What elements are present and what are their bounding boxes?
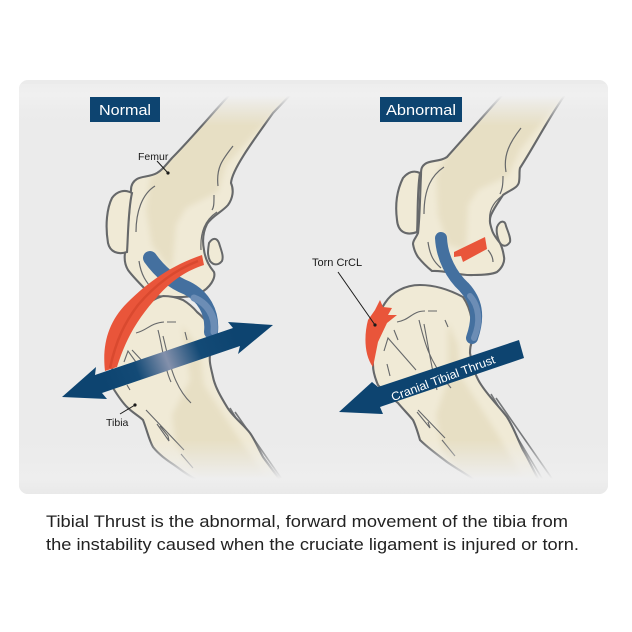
arrow: cranial tibial thrust — [339, 340, 524, 414]
illustration: abnormal knee — [339, 88, 570, 490]
icon: normal red ligament — [104, 255, 204, 371]
icon: normal femur bone — [125, 88, 295, 297]
icon: normal patella — [107, 191, 132, 253]
caption text — [46, 513, 579, 554]
icon: normal fabella — [208, 239, 223, 264]
arrow: normal two-way thrust — [62, 322, 273, 399]
label: Torn CrCL — [312, 257, 377, 327]
icon: abnormal patella — [396, 172, 420, 234]
icon: abnormal tibia bone — [372, 285, 540, 490]
label: Normal — [90, 97, 160, 122]
label: Femur: Femur — [138, 151, 169, 163]
label: Tibia: Tibia — [106, 417, 129, 429]
icon: abnormal tendons — [487, 394, 553, 480]
illustration: normal knee — [62, 88, 295, 490]
label: Abnormal: Abnormal — [386, 102, 456, 119]
label: Tibia — [106, 403, 137, 429]
icon: torn red ligament — [365, 300, 397, 367]
label: Abnormal — [380, 97, 462, 122]
icon: abnormal red ligament fragment — [454, 237, 487, 262]
caption text: the instability caused when the cruciate ligament is injured or torn. — [46, 536, 579, 554]
label: Torn CrCL: Torn CrCL — [312, 257, 362, 269]
icon: normal tibia bone — [112, 296, 280, 490]
icon: abnormal blue ligament — [441, 238, 478, 338]
icon: normal blue ligament — [150, 258, 214, 332]
icon: abnormal fabella — [497, 222, 510, 246]
arrow label: Cranial Tibial Thrust: Cranial Tibial Thrust — [389, 352, 498, 404]
panel: illustration background — [19, 80, 608, 494]
icon: abnormal femur bone — [413, 88, 570, 275]
label: Femur — [138, 151, 170, 175]
label: Normal: Normal — [99, 102, 151, 119]
icon: normal tendons — [226, 405, 281, 478]
caption text: Tibial Thrust is the abnormal, forward movement of the tibia from — [46, 513, 568, 531]
